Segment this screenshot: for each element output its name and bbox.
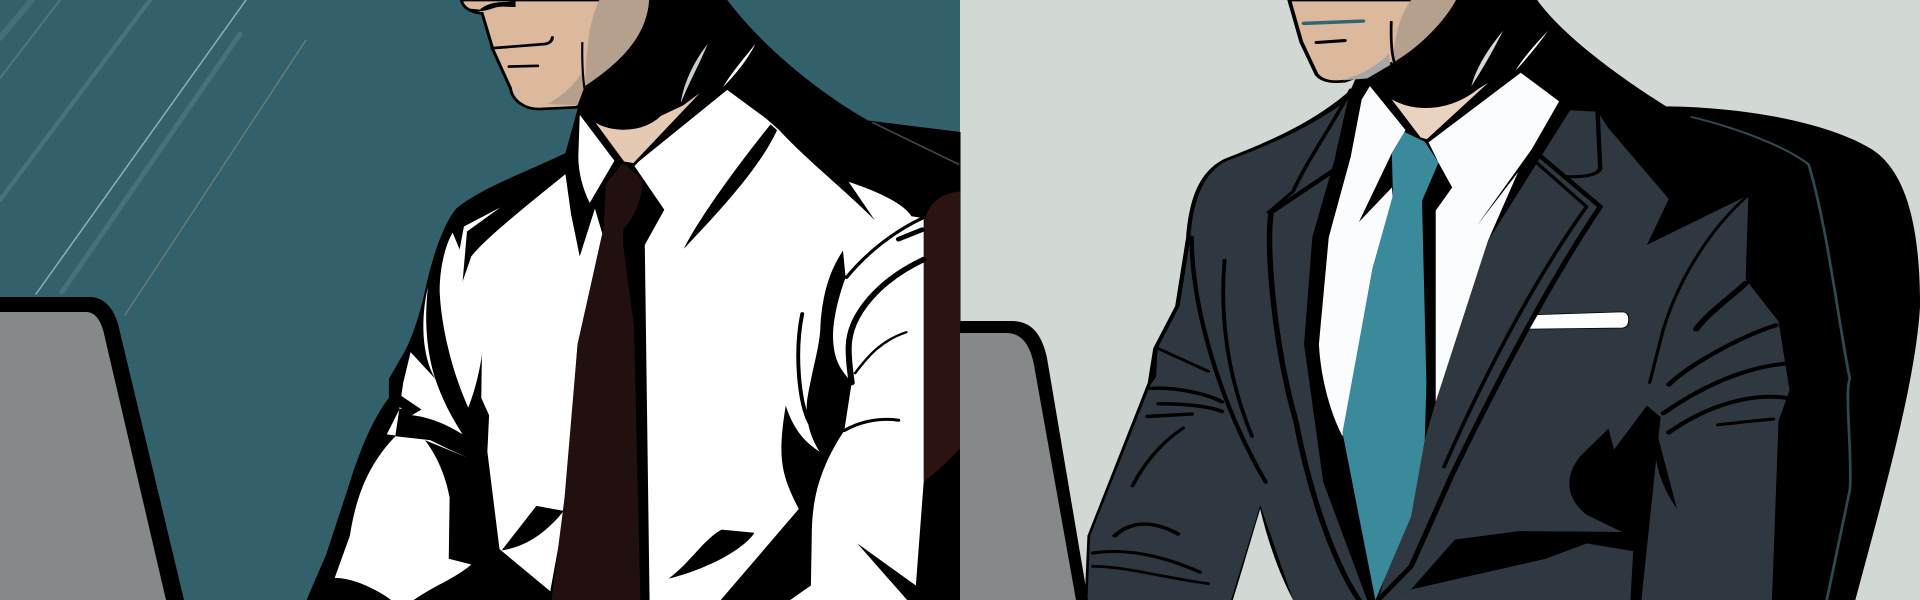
hair highlights bbox=[681, 44, 708, 103]
shirt waist fold bbox=[502, 506, 564, 550]
laptop: left bbox=[0, 297, 184, 600]
neck collar shadow bbox=[1378, 50, 1504, 107]
face bbox=[461, 0, 649, 109]
chin shadow bbox=[547, 71, 584, 105]
mouth bbox=[492, 38, 552, 48]
right laptop outline bbox=[960, 321, 1088, 600]
brown chair panel bbox=[924, 191, 961, 482]
left laptop screen back bbox=[0, 312, 166, 600]
suit line work bbox=[1093, 90, 1787, 600]
face bbox=[1289, 0, 1456, 82]
mouth teal line bbox=[1304, 21, 1363, 23]
lower lip bbox=[509, 62, 538, 70]
left collar bbox=[578, 115, 614, 203]
suit dark patches bbox=[1411, 531, 1622, 589]
cheek shadow bbox=[1392, 0, 1456, 63]
sleeve shadow fold bbox=[1655, 436, 1677, 509]
hair highlight second bbox=[1515, 31, 1548, 71]
left laptop outline bbox=[0, 297, 184, 600]
left lower forearm bbox=[335, 436, 471, 600]
shirt right side bbox=[1429, 73, 1559, 402]
neck bbox=[587, 82, 712, 165]
neck bbox=[1381, 73, 1502, 141]
figure: left man in white shirt and dark tie bbox=[307, 0, 961, 600]
lower lip bbox=[1317, 41, 1345, 42]
teal tie bbox=[1342, 132, 1438, 600]
panel: left teal background bbox=[0, 0, 960, 600]
collar slit fold bbox=[684, 124, 777, 249]
chair seam bbox=[1691, 117, 1850, 600]
right shirt large fold bbox=[721, 251, 852, 600]
right figure and chair silhouette bbox=[1085, 0, 1920, 600]
tie bbox=[552, 163, 643, 600]
panel: right pale grey background bbox=[960, 0, 1920, 600]
hair highlight white bbox=[723, 44, 755, 87]
left figure silhouette bbox=[307, 0, 961, 600]
figure: right man in dark suit and teal tie bbox=[1085, 0, 1920, 600]
chin shadow bbox=[1342, 54, 1390, 80]
shirt left shoulder and sleeve bbox=[440, 207, 500, 408]
face crease bbox=[582, 42, 585, 89]
suit right body bbox=[1378, 110, 1790, 600]
suit lower pocket area bbox=[1389, 543, 1633, 600]
shirt left chest bbox=[463, 174, 602, 591]
nose bbox=[467, 0, 516, 11]
grey gap between arm and body bbox=[1233, 509, 1293, 600]
neck black collar shadow bbox=[586, 77, 682, 129]
face crease bbox=[1391, 21, 1395, 63]
right laptop screen back bbox=[960, 333, 1076, 600]
shirt pocket shadow bbox=[669, 530, 755, 579]
chair texture bbox=[872, 122, 959, 165]
light streaks on left background bbox=[0, 0, 306, 315]
left sleeve fold bbox=[398, 393, 421, 415]
shirt right chest and sleeve bbox=[634, 90, 924, 600]
pocket square bbox=[1529, 312, 1629, 329]
hair highlights bbox=[1471, 31, 1503, 86]
suit left body bbox=[1087, 100, 1367, 600]
laptop: right bbox=[960, 321, 1088, 600]
shirt left side bbox=[1319, 86, 1406, 436]
left upper forearm bbox=[387, 352, 463, 436]
cheek shadow bbox=[585, 0, 649, 86]
right shirt fold lines bbox=[798, 218, 924, 431]
left sleeve sliver bbox=[423, 287, 435, 379]
